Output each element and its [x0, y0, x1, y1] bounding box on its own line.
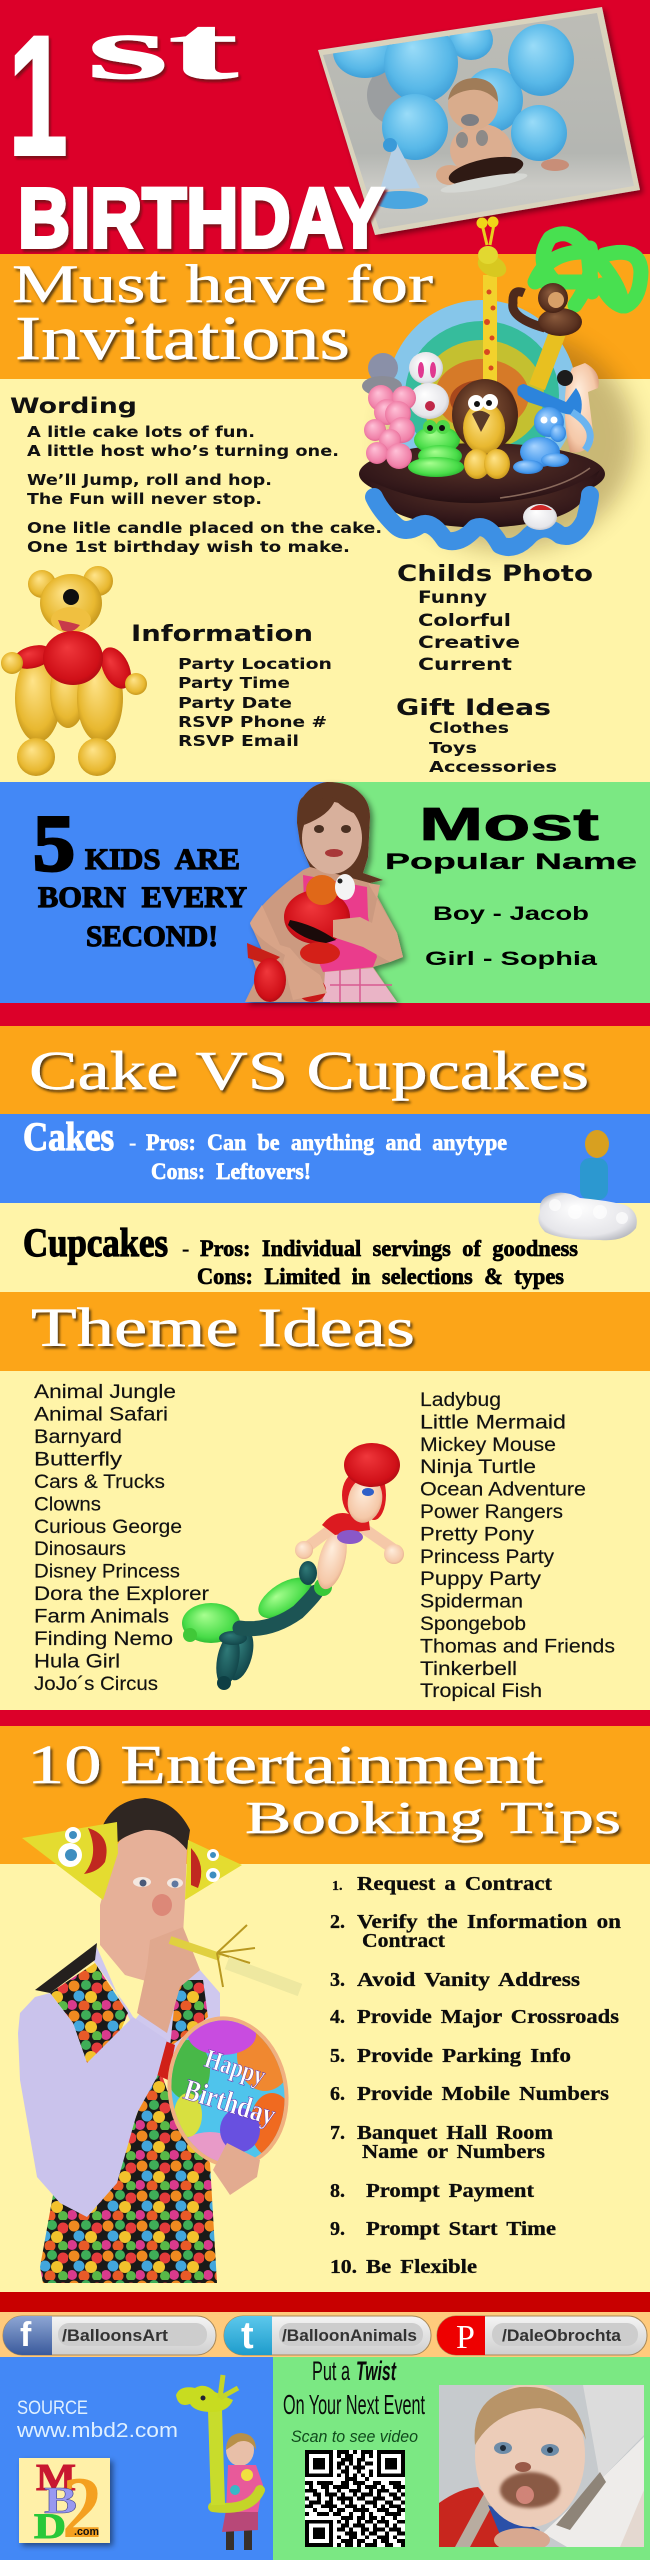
vest upper panels	[50, 1963, 128, 2063]
social: twitter: /BalloonAnimals	[282, 2326, 417, 2345]
list: themes left column: Animal Jungle	[34, 1382, 176, 1403]
waves	[374, 495, 590, 547]
list: booking tips: 2.	[330, 1911, 345, 1933]
text block: Gift Ideas: Toys	[429, 739, 477, 757]
left hat	[22, 1822, 118, 1900]
band: orange booking header	[0, 1726, 650, 1864]
list: booking tips: 6.	[330, 2083, 345, 2105]
list: themes left column: Hula Girl	[34, 1652, 120, 1672]
photo: baby with blue balloons	[318, 7, 640, 235]
list: booking tips: Provide Mobile Numbers	[357, 2083, 609, 2105]
list: themes left column: Disney Princess	[34, 1562, 180, 1583]
text: source: www.mbd2.com	[16, 2420, 178, 2442]
list: themes left column	[34, 1382, 210, 1695]
vest shoulder	[35, 1943, 97, 1993]
text: Most Popular Name	[385, 798, 637, 970]
list: themes left column: Finding Nemo	[34, 1629, 173, 1650]
list: themes right column: Tinkerbell	[420, 1659, 517, 1680]
text block: Childs Photo: Current	[418, 655, 512, 675]
text: Most Popular Name: Popular Name	[385, 849, 637, 874]
text block: Wording: A litle cake lots of fun.	[27, 423, 255, 441]
text: Cupcakes pros and cons: Cons: Limited in selections & types	[197, 1264, 564, 1289]
rainbow	[394, 300, 573, 450]
text block: Childs Photo: Colorful	[418, 611, 511, 631]
text: 5 kids are born every second: SECOND!	[86, 920, 218, 953]
list: booking tips: 4.	[330, 2006, 345, 2028]
text block: Information: RSVP Phone #	[178, 713, 327, 731]
band: dark red divider	[0, 2292, 650, 2312]
list: themes right column: Ninja Turtle	[420, 1457, 536, 1478]
hand at blower	[137, 1927, 200, 2033]
list: themes right column: Pretty Pony	[420, 1524, 535, 1545]
list: booking tips: Banquet Hall Room	[357, 2122, 553, 2144]
text block: Wording: One litle candle placed on the cake.	[27, 519, 382, 537]
pink poodle	[368, 385, 394, 411]
list: themes right column: Princess Party	[420, 1547, 555, 1568]
text: Put a Twist: Put a	[312, 2356, 351, 2386]
list: booking tips: Prompt Start Time	[366, 2218, 556, 2240]
text: Cupcakes pros and cons: Cupcakes	[23, 1220, 168, 1265]
text block: Childs Photo: Childs Photo	[397, 562, 593, 587]
panel: blue kids-born background	[0, 782, 330, 1003]
illustration: balloon candle on cake	[538, 1130, 637, 1240]
panel: cream cupcakes row	[0, 1203, 650, 1292]
text: source	[16, 2398, 178, 2442]
palm leaves	[535, 234, 641, 306]
text: 5 kids are born every second	[33, 800, 247, 953]
text block: Gift Ideas	[396, 696, 557, 776]
neck and face	[100, 1828, 187, 1985]
list: booking tips	[330, 1873, 621, 2278]
social: twitter	[224, 2315, 431, 2357]
sleeve	[18, 1993, 167, 2217]
social: pinterest: P	[456, 2319, 475, 2356]
band: red divider 2	[0, 1710, 650, 1726]
text block: Information: Party Time	[178, 674, 290, 692]
text: Cakes pros and cons: Cons: Leftovers!	[151, 1159, 311, 1184]
list: themes right column: Spiderman	[420, 1592, 523, 1613]
logo: MBD2: B	[44, 2480, 77, 2522]
text: Cakes pros and cons: -	[129, 1130, 136, 1155]
text: Most Popular Name: Girl - Sophia	[425, 949, 598, 970]
band: orange cake header	[0, 1026, 650, 1114]
list: booking tips: Provide Parking Info	[357, 2045, 571, 2067]
social: twitter: t	[241, 2315, 254, 2357]
photo: baby with chocolate face	[439, 2383, 644, 2552]
right hat	[185, 1840, 242, 1900]
list: themes right column: Puppy Party	[420, 1569, 542, 1590]
image: man in party hats with blower and plate	[18, 1798, 300, 2283]
list: booking tips: Verify the Information on	[357, 1911, 621, 1933]
list: booking tips: Request a Contract	[357, 1873, 552, 1895]
social: pinterest	[437, 2316, 647, 2356]
text: Cakes pros and cons: Cakes	[23, 1114, 114, 1159]
logo: MBD2: D	[34, 2506, 66, 2546]
text: Most Popular Name: Most	[419, 798, 599, 850]
illustration: balloon Noah's ark	[359, 216, 641, 550]
list: themes left column: Animal Safari	[34, 1404, 168, 1426]
text block: Childs Photo: Funny	[418, 588, 487, 608]
qr code	[305, 2450, 405, 2547]
text block: Childs Photo	[397, 562, 593, 675]
text block: Wording: A little host who’s turning one.	[27, 442, 339, 460]
panel: cream booking tips background	[0, 1864, 650, 2292]
text block: Information	[131, 622, 332, 750]
hair	[103, 1798, 190, 1850]
text block: Wording: We’ll Jump, roll and hop.	[27, 471, 272, 489]
text block: Wording: One 1st birthday wish to make.	[27, 538, 350, 556]
text block: Childs Photo: Creative	[418, 633, 520, 653]
list: booking tips: 8.	[330, 2180, 345, 2202]
image: girl hugging red balloon	[245, 782, 403, 1002]
blue dog	[517, 384, 582, 416]
text: Put a Twist: Twist	[356, 2356, 397, 2386]
text: 5 kids are born every second: 5	[33, 800, 75, 888]
text block: Gift Ideas: Clothes	[429, 719, 509, 737]
text: 5 kids are born every second: BORN EVERY	[38, 881, 247, 914]
list: themes right column: Tropical Fish	[420, 1681, 542, 1702]
list: themes right column: Mickey Mouse	[420, 1435, 556, 1456]
title: BIRTHDAY: BIRTHDAY	[18, 171, 384, 265]
list: themes right column: Spongebob	[420, 1614, 526, 1635]
text block: Wording: Wording	[10, 394, 137, 418]
list: booking tips: 3.	[330, 1969, 345, 1991]
band: social strip	[0, 2312, 650, 2357]
text block: Wording	[10, 394, 382, 556]
text: Cupcakes pros and cons	[23, 1220, 578, 1289]
shirt front	[93, 1943, 220, 2060]
palm trunk	[537, 305, 568, 387]
list: themes left column: Cars & Trucks	[34, 1472, 165, 1493]
title: 1: 1	[8, 0, 68, 192]
logo: MBD2: 2	[62, 2460, 102, 2557]
social: facebook: f	[20, 2316, 32, 2354]
panel: blue source footer	[0, 2357, 273, 2560]
illustration: balloon mermaid	[182, 1443, 404, 1690]
list: themes left column: Clowns	[34, 1494, 101, 1515]
band: red title background	[0, 0, 650, 254]
monkey	[513, 292, 545, 328]
panel: green popular-name background	[330, 782, 650, 1003]
text: On Your Next Event: On Your Next Event	[283, 2389, 425, 2420]
list: booking tips: 10.	[330, 2256, 357, 2278]
list: booking tips: Name or Numbers	[362, 2141, 545, 2163]
list: booking tips: 1.	[332, 1879, 342, 1894]
text: Cupcakes pros and cons: -	[182, 1236, 189, 1261]
heading: Must have for: Must have for	[12, 254, 433, 314]
list: booking tips: Be Flexible	[366, 2256, 477, 2278]
vest lower	[40, 2060, 217, 2283]
list: booking tips: 5.	[330, 2045, 345, 2067]
text block: Information: Information	[131, 622, 313, 647]
list: themes left column: Dora the Explorer	[34, 1584, 210, 1605]
list: themes left column: Barnyard	[34, 1427, 122, 1448]
list: booking tips: Avoid Vanity Address	[357, 1969, 580, 1991]
text block: Information: RSVP Email	[178, 732, 299, 750]
lower hand	[213, 2143, 260, 2195]
logo: MBD2: .com	[74, 2526, 99, 2538]
text: Scan to see video: Scan to see video	[291, 2427, 418, 2446]
logo: MBD2	[19, 2457, 110, 2557]
list: booking tips: 9.	[330, 2218, 345, 2240]
list: booking tips: Contract	[362, 1930, 445, 1952]
band: orange invitations header	[0, 254, 650, 379]
list: themes right column: Ladybug	[420, 1390, 501, 1411]
band: orange theme header	[0, 1292, 650, 1371]
list: themes left column: Farm Animals	[34, 1607, 169, 1628]
list: themes left column: Butterfly	[34, 1449, 123, 1470]
list: themes right column: Ocean Adventure	[420, 1480, 586, 1501]
title: st: st	[87, 0, 238, 98]
text: 5 kids are born every second: KIDS ARE	[85, 843, 240, 876]
hippo	[368, 353, 398, 383]
band: red divider	[0, 1003, 650, 1026]
text block: Information: Party Date	[178, 694, 292, 712]
list: booking tips: Prompt Payment	[366, 2180, 534, 2202]
heading: Invitations: Invitations	[15, 305, 350, 373]
bunny	[409, 352, 443, 384]
list: themes right column: Thomas and Friends	[420, 1636, 615, 1657]
panel: invitations cream background	[0, 379, 650, 782]
text: Cakes pros and cons: Pros: Can be anything and anytype	[146, 1130, 507, 1155]
heading: Booking Tips: Booking Tips	[245, 1792, 621, 1843]
giraffe	[483, 275, 497, 383]
illustration: balloon bear	[1, 566, 147, 776]
heading: Cake VS Cupcakes: Cake VS Cupcakes	[29, 1040, 589, 1101]
text block: Information: Party Location	[178, 655, 332, 673]
panel: blue cakes row	[0, 1114, 650, 1203]
image: girl with balloon giraffe	[176, 2375, 263, 2550]
list: themes right column	[420, 1390, 615, 1702]
list: themes right column: Power Rangers	[420, 1502, 563, 1523]
logo: MBD2: M	[36, 2457, 76, 2499]
list: themes left column: Curious George	[34, 1517, 182, 1538]
heading: 10 Entertainment: 10 Entertainment	[27, 1734, 543, 1795]
social: pinterest: /DaleObrochta	[502, 2326, 622, 2345]
image: man in party hats with blower and plate: Birthday	[180, 2073, 279, 2132]
list: themes left column: Dinosaurs	[34, 1539, 126, 1560]
blower	[170, 1940, 220, 1957]
list: booking tips: Provide Major Crossroads	[357, 2006, 619, 2028]
boat	[359, 443, 605, 505]
text: source: SOURCE	[17, 2398, 88, 2419]
list: themes right column: Little Mermaid	[420, 1412, 566, 1433]
plate	[156, 2007, 300, 2177]
horse	[565, 363, 599, 452]
text: Cakes pros and cons	[23, 1114, 507, 1184]
panel: green video footer	[273, 2357, 650, 2560]
social: facebook: /BalloonsArt	[62, 2326, 168, 2345]
panel: cream theme list background	[0, 1371, 650, 1710]
social: facebook	[3, 2316, 216, 2355]
list: themes left column: JoJo´s Circus	[34, 1674, 158, 1695]
list: booking tips: 7.	[330, 2122, 345, 2144]
heading: Theme Ideas: Theme Ideas	[31, 1297, 415, 1358]
text: Cupcakes pros and cons: Pros: Individual servings of goodness	[200, 1236, 578, 1261]
text: Most Popular Name: Boy - Jacob	[433, 904, 589, 925]
text block: Gift Ideas: Gift Ideas	[396, 696, 551, 721]
frog	[414, 426, 460, 454]
lion	[452, 379, 518, 451]
text block: Wording: The Fun will never stop.	[27, 490, 262, 508]
text block: Gift Ideas: Accessories	[429, 758, 557, 776]
image: man in party hats with blower and plate: Happy	[201, 2043, 270, 2091]
